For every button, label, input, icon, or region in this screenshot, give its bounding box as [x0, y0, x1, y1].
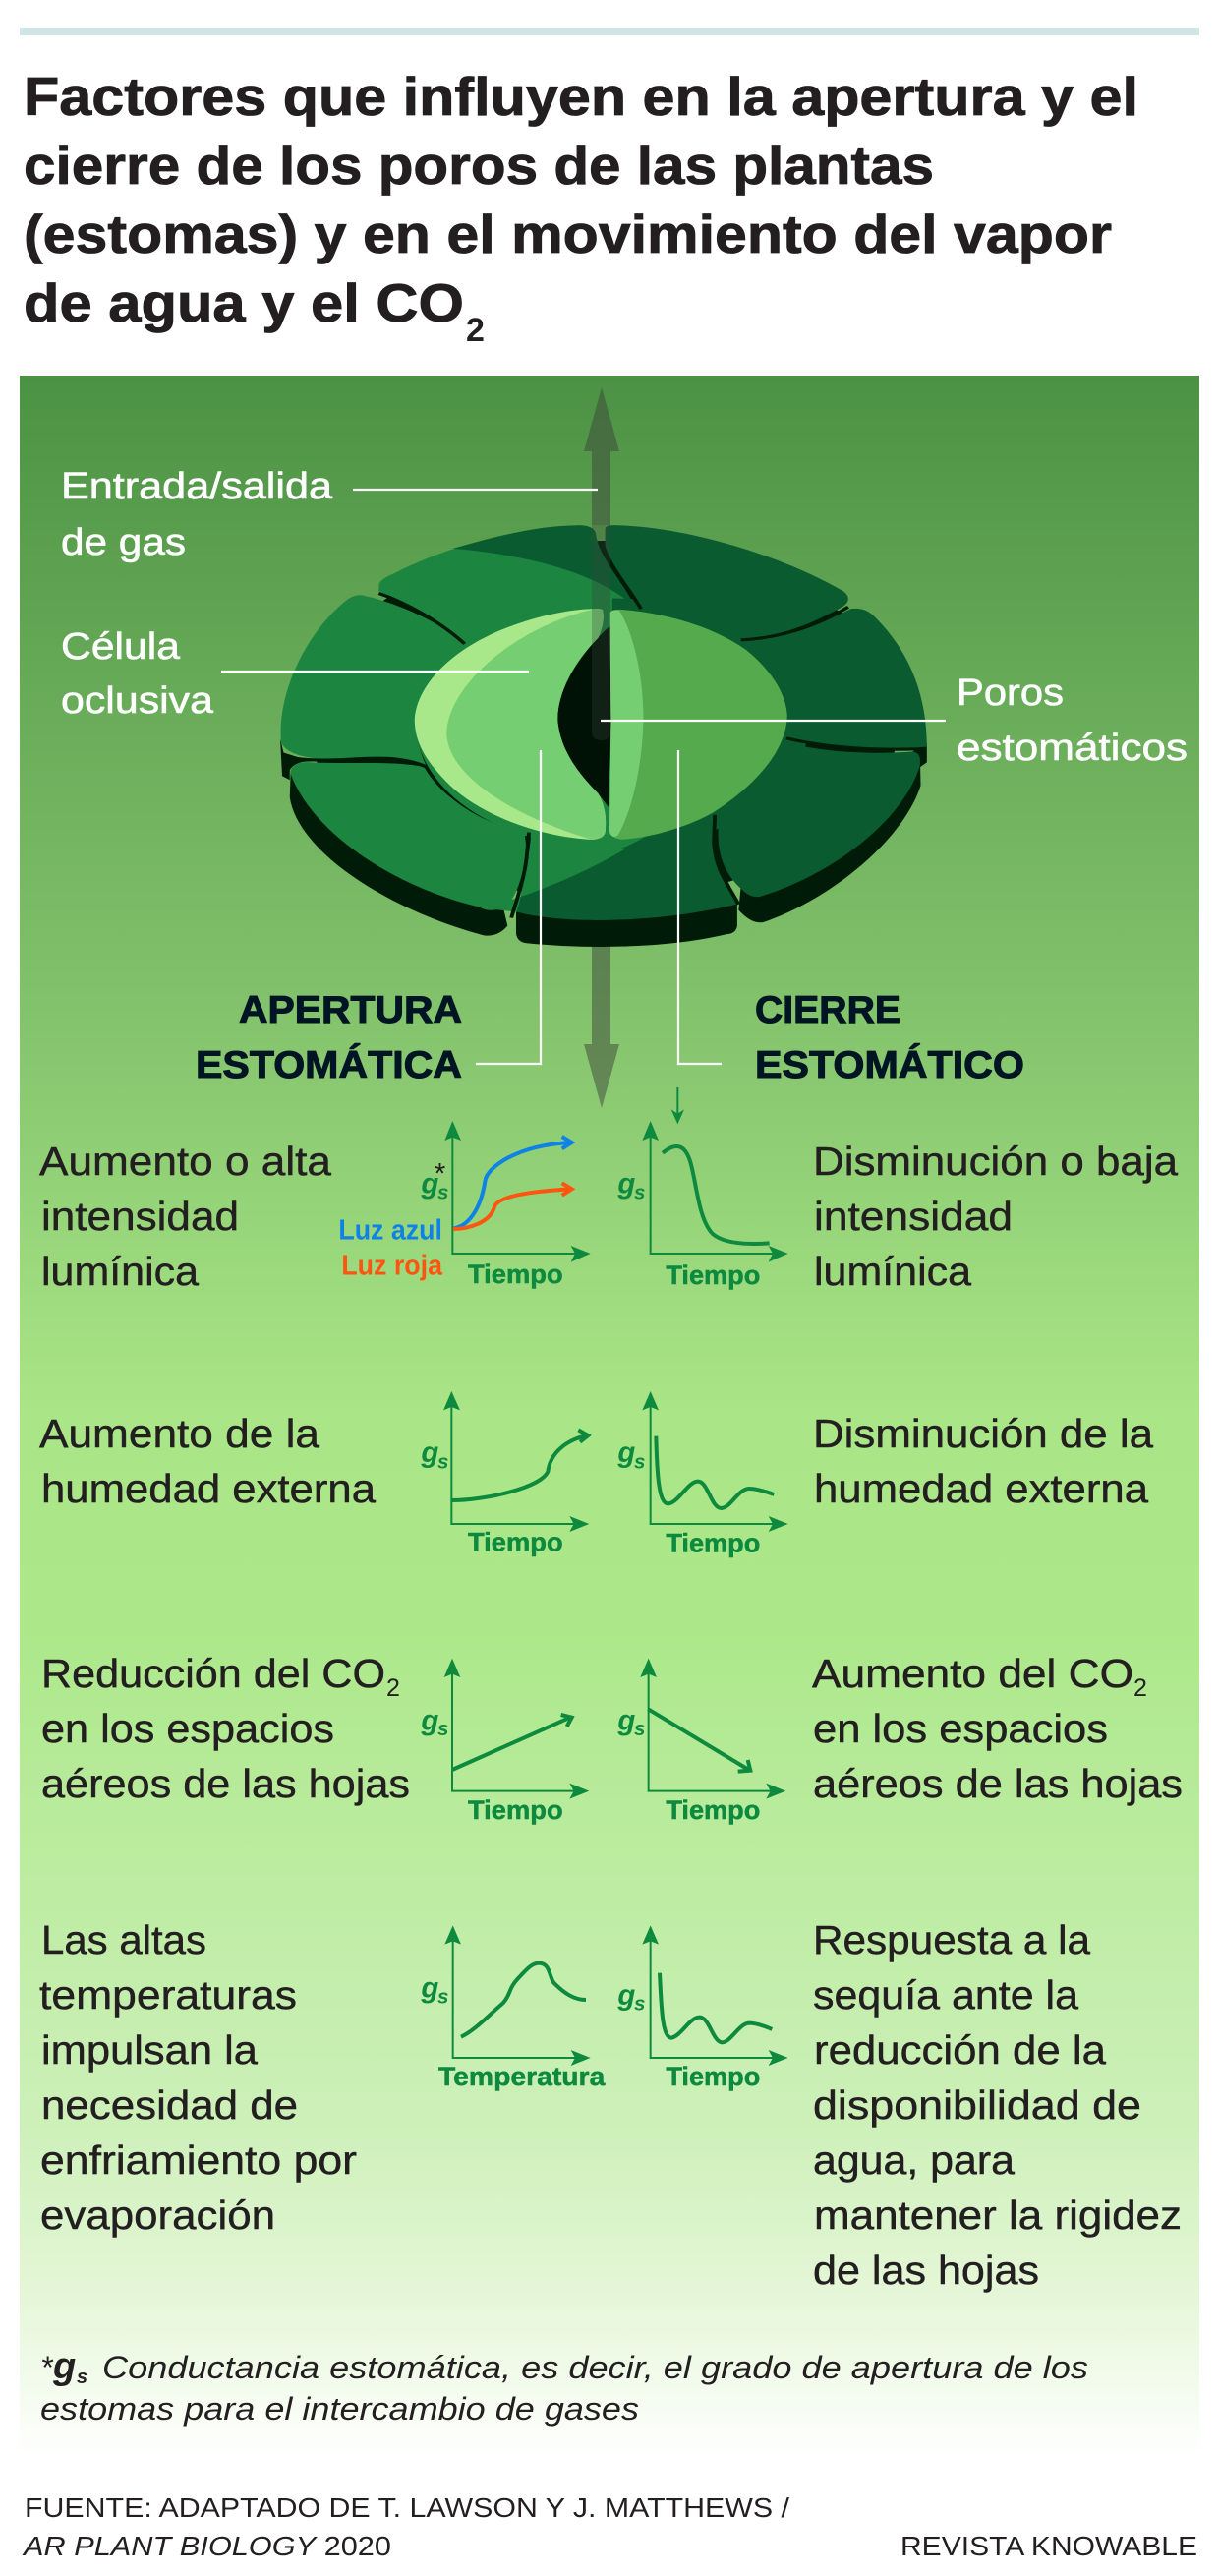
- stomatal pore: [557, 626, 610, 807]
- chart: response to temperature: s: [437, 1985, 448, 2008]
- text: drought response: sequía ante la: [813, 1972, 1078, 2018]
- label: stomatal pores: Poros: [957, 673, 1064, 714]
- text: high temperatures: evaporación: [40, 2193, 275, 2238]
- chart: opening with less CO2: s: [437, 1718, 448, 1740]
- chart: opening with humidity: s: [437, 1450, 448, 1473]
- text: low light intensity: intensidad: [814, 1194, 1013, 1239]
- text: higher external humidity: Aumento de la: [39, 1411, 319, 1456]
- text: high light intensity: lumínica: [41, 1249, 199, 1294]
- title: (estomas) y en el movimiento del vapor: [24, 204, 1112, 264]
- chart: closing with low light: [616, 1087, 788, 1290]
- label: gas entry/exit: Entrada/salida: [61, 466, 333, 507]
- title: Factores que influyen en la apertura y el: [24, 66, 1138, 127]
- text: drought response: Respuesta a la: [813, 1917, 1090, 1962]
- chart: closing with more CO2: s: [634, 1718, 645, 1740]
- text: high temperatures: [39, 1917, 357, 2238]
- label: guard cell: oclusiva: [61, 680, 214, 722]
- chart: closing with low humidity: Tiempo: [666, 1529, 760, 1558]
- text: lower external humidity: humedad externa: [814, 1466, 1148, 1511]
- heading: stomatal opening: ESTOMÁTICA: [196, 1043, 462, 1086]
- footnote: stomatal conductance: estomas para el intercambio de gases: [40, 2391, 639, 2427]
- chart: closing with more CO2: [616, 1659, 785, 1825]
- text: low light intensity: Disminución o baja: [813, 1139, 1178, 1184]
- arrow: gas flow upper part: [584, 387, 619, 740]
- text: reduced CO2: aéreos de las hojas: [41, 1761, 410, 1806]
- text: higher external humidity: [39, 1411, 376, 1511]
- text: increased CO2: 2: [1133, 1674, 1147, 1702]
- title: 2: [466, 312, 485, 349]
- text: reduced CO2: Reducción del CO: [41, 1651, 385, 1696]
- chart: closing with low light: Tiempo: [666, 1260, 760, 1290]
- gaps between cells: [283, 545, 922, 918]
- footnote: stomatal conductance: s: [77, 2367, 87, 2388]
- text: low light intensity: lumínica: [814, 1249, 971, 1294]
- heading: stomatal closing: ESTOMÁTICO: [755, 1043, 1024, 1086]
- chart: closing with more CO2: g: [616, 1704, 635, 1736]
- title: cierre de los poros de las plantas: [24, 135, 934, 196]
- text: reduced CO2: en los espacios: [41, 1706, 334, 1751]
- chart: response to drought: s: [634, 1993, 645, 2016]
- arrow: gas flow lower part: [584, 944, 619, 1108]
- label: gas entry/exit: de gas: [61, 522, 186, 563]
- chart: closing with low humidity: g: [616, 1436, 635, 1469]
- label: guard cell: [61, 626, 529, 722]
- text: low light intensity: [813, 1139, 1178, 1294]
- text: drought response: mantener la rigidez: [814, 2193, 1182, 2238]
- text: higher external humidity: humedad externa: [41, 1466, 376, 1511]
- publisher credit: REVISTA KNOWABLE: [900, 2531, 1197, 2561]
- text: high temperatures: Las altas: [41, 1917, 206, 1962]
- text: drought response: reducción de la: [814, 2027, 1106, 2073]
- text: high light intensity: intensidad: [41, 1194, 239, 1239]
- chart: response to drought: Tiempo: [666, 2062, 760, 2091]
- chart: closing with low humidity: [616, 1391, 788, 1558]
- chart: opening with less CO2: Tiempo: [468, 1795, 563, 1825]
- text: lower external humidity: Disminución de la: [813, 1411, 1153, 1456]
- text: high temperatures: enfriamiento por: [40, 2137, 357, 2183]
- text: increased CO2: aéreos de las hojas: [813, 1761, 1183, 1806]
- chart: response to temperature: [420, 1925, 606, 2091]
- title: de agua y el CO: [24, 272, 464, 333]
- chart: closing with low light: g: [616, 1168, 635, 1200]
- chart: opening with light: g: [420, 1168, 438, 1200]
- footnote: stomatal conductance: Conductancia estomática, es decir, el grado de apertura de los: [102, 2350, 1088, 2385]
- chart: closing with more CO2: Tiempo: [666, 1795, 760, 1825]
- label: stomatal pores: estomáticos: [957, 728, 1188, 769]
- chart: opening with light: Luz roja: [341, 1251, 443, 1282]
- source credit: AR PLANT BIOLOGY 2020: [22, 2531, 391, 2561]
- chart: opening with humidity: g: [420, 1436, 438, 1469]
- heading: stomatal opening: APERTURA: [239, 989, 462, 1031]
- text: high light intensity: Aumento o alta: [39, 1139, 331, 1184]
- heading: stomatal opening: [196, 750, 541, 1086]
- text: drought response: [813, 1917, 1182, 2293]
- epidermal cells: [281, 525, 927, 920]
- panel: green gradient background: [20, 376, 1199, 2458]
- chart: opening with light: Tiempo: [468, 1259, 563, 1289]
- text: reduced CO2: 2: [386, 1674, 400, 1702]
- fill beneath the guard cells: [416, 599, 612, 849]
- footnote: stomatal conductance: [40, 2346, 1088, 2427]
- chart: opening with light: s: [437, 1181, 448, 1203]
- text: high temperatures: necesidad de: [41, 2082, 298, 2128]
- chart: opening with light: Luz azul: [338, 1215, 442, 1247]
- chart: opening with humidity: Tiempo: [468, 1528, 563, 1557]
- chart: opening with light: *: [435, 1157, 446, 1190]
- guard cell: open (left): [415, 609, 606, 840]
- side walls and dark backing of the leaf cells: [280, 541, 927, 947]
- text: high temperatures: impulsan la: [41, 2027, 258, 2073]
- heading: stomatal closing: CIERRE: [755, 989, 900, 1031]
- text: drought response: disponibilidad de: [813, 2082, 1141, 2128]
- source credit: FUENTE: ADAPTADO DE T. LAWSON Y J. MATTHEWS /: [25, 2492, 789, 2523]
- guard cell: closed (right): [610, 610, 787, 840]
- chart: opening with less CO2: g: [420, 1704, 438, 1736]
- text: lower external humidity: [813, 1411, 1153, 1511]
- text: high temperatures: temperaturas: [39, 1972, 297, 2018]
- label: guard cell: Célula: [61, 626, 181, 668]
- chart: closing with low light: s: [634, 1181, 645, 1203]
- title: [24, 66, 1138, 349]
- chart: closing with low humidity: s: [634, 1450, 645, 1473]
- label: stomatal pores: [601, 673, 1188, 769]
- text: increased CO2: [812, 1651, 1183, 1806]
- text: increased CO2: Aumento del CO: [812, 1651, 1133, 1696]
- source credit: [22, 2492, 789, 2561]
- top rule: [20, 28, 1199, 35]
- footnote: stomatal conductance: g: [52, 2346, 76, 2387]
- chart: opening with humidity: [420, 1391, 589, 1557]
- text: drought response: de las hojas: [813, 2248, 1039, 2293]
- text: reduced CO2: [41, 1651, 410, 1806]
- chart: response to temperature: Temperatura: [438, 2062, 606, 2091]
- icon: stoma illustration: [280, 525, 927, 947]
- chart: response to temperature: g: [420, 1972, 438, 2005]
- chart: response to drought: g: [616, 1979, 635, 2012]
- chart: opening with less CO2: [420, 1659, 589, 1825]
- chart: opening with light: [338, 1121, 591, 1289]
- text: drought response: agua, para: [813, 2137, 1015, 2183]
- text: increased CO2: en los espacios: [813, 1706, 1108, 1751]
- chart: response to drought: [616, 1925, 788, 2091]
- text: high light intensity: [39, 1139, 331, 1294]
- heading: stomatal closing: [678, 750, 1024, 1086]
- footnote: stomatal conductance: *: [40, 2350, 54, 2385]
- label: gas entry/exit: [61, 466, 598, 563]
